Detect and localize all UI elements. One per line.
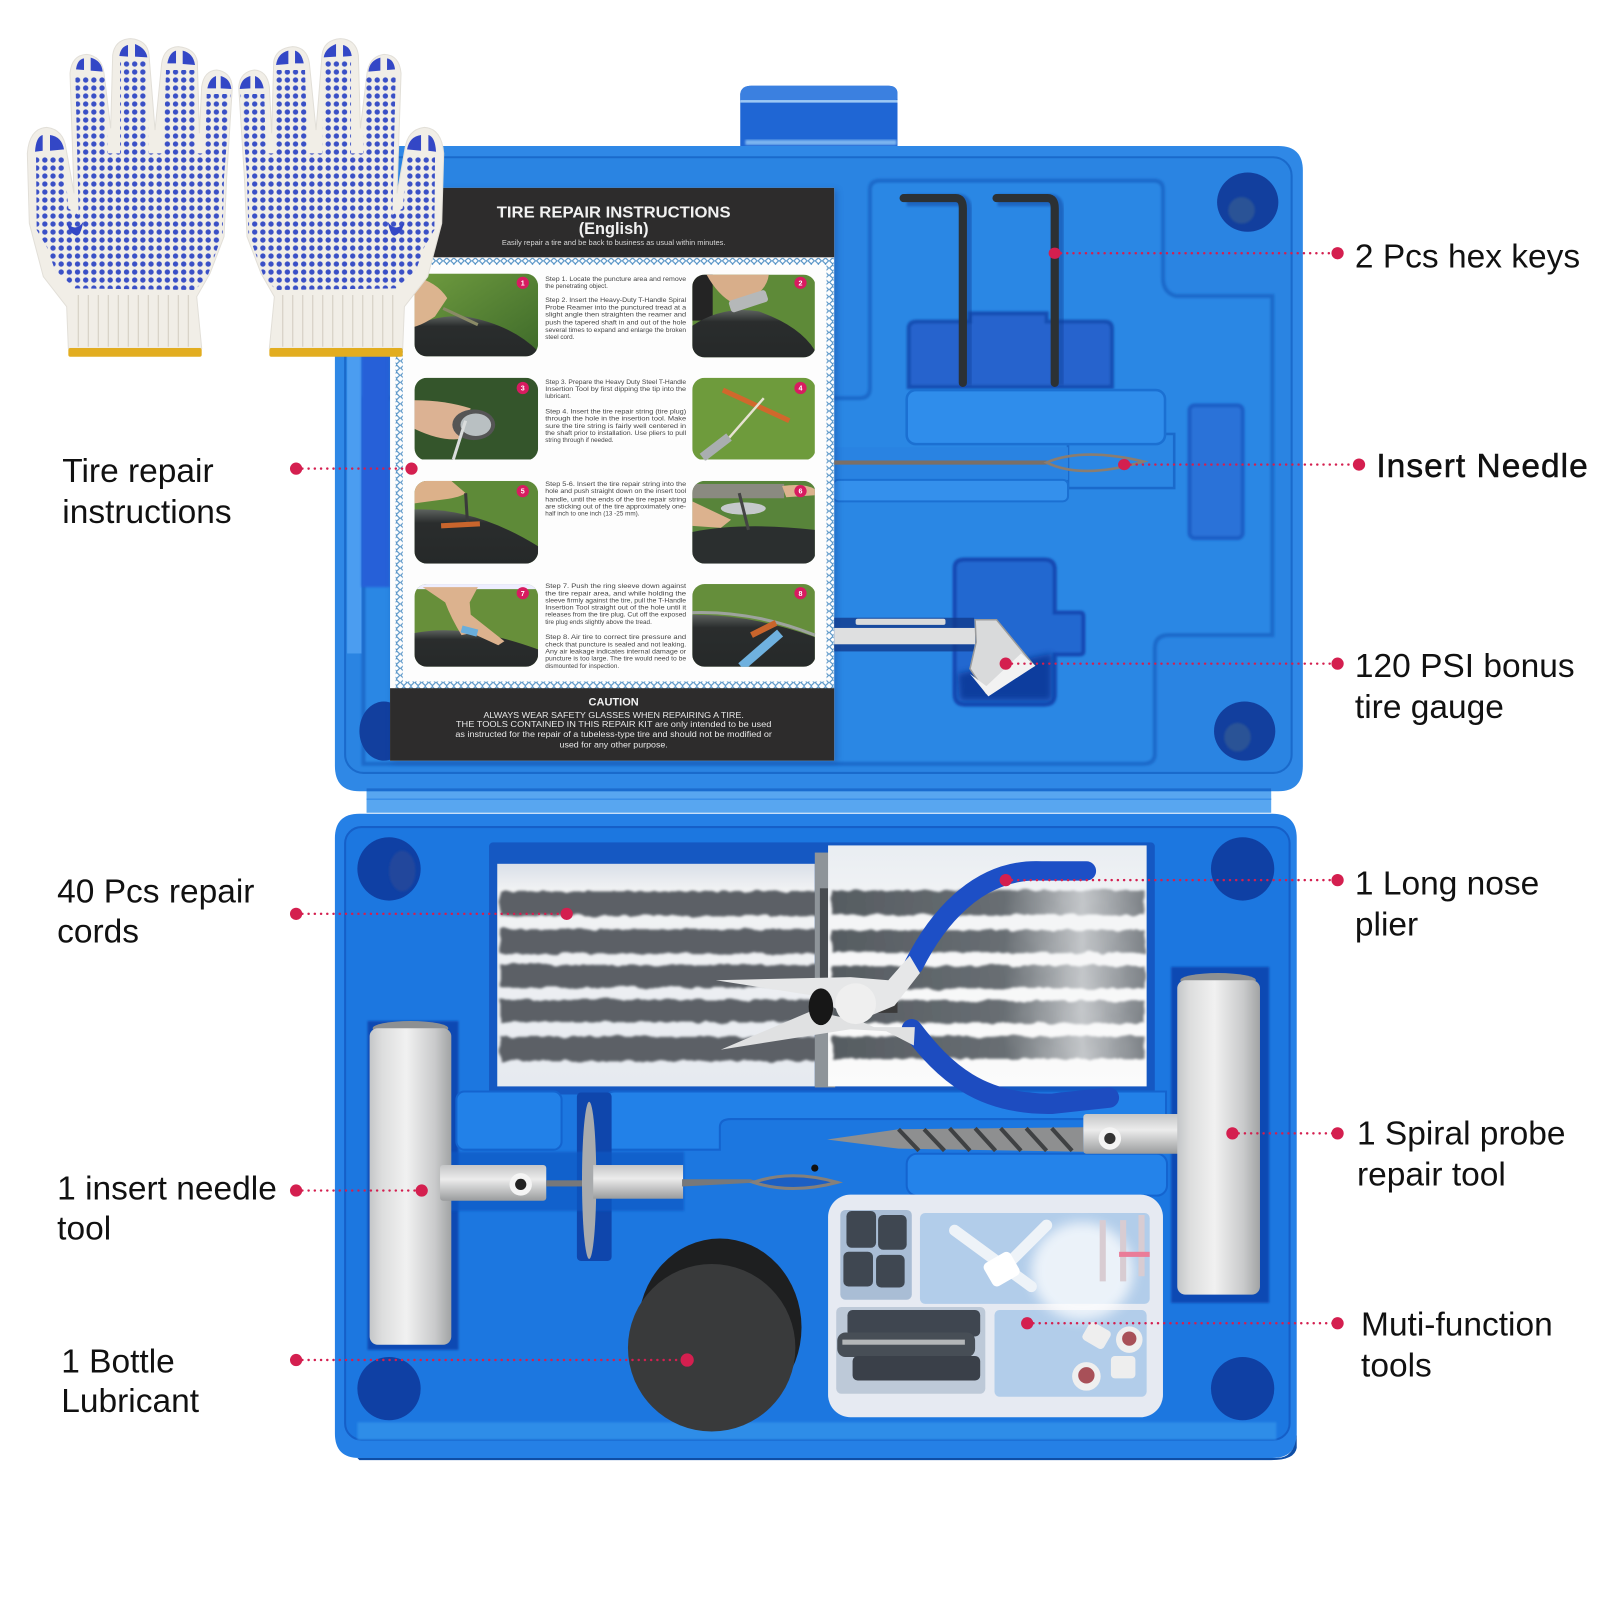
sheet step text: Step 4. Insert the tire repair string (tire plug): [545, 409, 686, 416]
left handle recess: [368, 1021, 458, 1350]
callout: Muti-function tools: Muti-function: [1361, 1307, 1553, 1344]
icon: spiral probe T-handle tool: [827, 973, 1260, 1295]
icon: work gloves: [27, 39, 444, 357]
callout: Tire repair instructions: [62, 453, 418, 531]
sheet step text: puncture is too large. The tire would need to be: [545, 656, 687, 663]
valve tool and glare: [955, 1215, 1150, 1320]
sheet step text: Probe Reamer into the punctured tread at a: [545, 304, 687, 311]
sheet caution footer: ALWAYS WEAR SAFETY GLASSES WHEN REPAIRING A TIRE.: [483, 711, 744, 720]
sheet step text: Insertion Tool by first dipping the tip into the: [545, 386, 687, 393]
callout: 1 Spiral probe repair tool: repair tool: [1357, 1156, 1506, 1193]
needle channel end: [1068, 434, 1174, 488]
sheet header: Easily repair a tire and be back to business as usual within minutes.: [502, 240, 726, 247]
sheet caution footer: used for any other purpose.: [560, 740, 668, 749]
sheet step text: push the tapered shaft in and out of the hole: [545, 320, 687, 327]
photo number badges: 8: [799, 590, 803, 598]
sheet step text: string through if needed.: [545, 437, 614, 444]
tray recess: [489, 842, 1155, 1095]
sheet step text: are sticking out of the tire approximately one-: [545, 503, 686, 510]
valve caps red: [1072, 1321, 1143, 1391]
sheet step text: dismounted for inspection.: [545, 663, 619, 670]
callout: 1 Long nose plier: plier: [1355, 906, 1418, 943]
sheet step text: the shaft prior to installation. Use pliers to pull: [545, 430, 686, 437]
sheet step text: sure the tire string is fairly well centered in: [545, 423, 687, 430]
callout: 40 Pcs repair cords: cords: [57, 913, 139, 950]
callout: 1 insert needle tool: 1 insert needle: [57, 1171, 277, 1208]
sheet step text: Any air leakage indicates internal damage or: [545, 648, 686, 655]
callout: Tire repair instructions: Tire repair: [62, 453, 214, 490]
callout: Muti-function tools: [1021, 1307, 1553, 1384]
photo number badges: 4: [799, 385, 803, 393]
sheet step text: lubricant.: [545, 393, 571, 400]
sheet step text: the penetrating object.: [545, 283, 608, 290]
raised strip: [833, 480, 1068, 501]
photo number badges: 3: [521, 385, 525, 393]
callout: 40 Pcs repair cords: [57, 874, 573, 950]
left light strip: [347, 347, 361, 653]
sheet step text: tire plug ends slightly above the tread.: [545, 619, 652, 626]
photo number badges: 1: [521, 279, 525, 287]
sheet step text: Step 2. Insert the Heavy-Duty T-Handle Spiral: [545, 297, 686, 304]
photo 6: [692, 481, 815, 564]
icon: insert needle: [834, 455, 1144, 471]
handle channel shadow: [449, 1152, 684, 1211]
panel: blue case upper half: [335, 86, 1303, 791]
raised block probe: [907, 1154, 1167, 1196]
sheet step text: Step 5-6. Insert the tire repair string into the: [545, 481, 687, 488]
photo 1: [415, 274, 538, 356]
photo number badges: 7: [521, 590, 525, 598]
sheet step text: handle, until the ends of the tire repair string: [545, 496, 687, 503]
sheet step text: sleeve firmly against the tire, pull the T-Handle: [545, 597, 687, 604]
callout: 1 Bottle Lubricant: Lubricant: [61, 1383, 200, 1420]
callout: 120 PSI bonus tire gauge: [1000, 648, 1575, 726]
icon: tire gauge: [834, 618, 1035, 696]
raised block right: [607, 1091, 1166, 1150]
sheet step text: [545, 276, 687, 670]
photo 4: [692, 378, 815, 459]
photo 5: [415, 481, 538, 564]
case latch: [740, 86, 897, 153]
right handle recess: [1171, 967, 1269, 1303]
photo 2: [692, 275, 815, 357]
photo 3: [415, 378, 538, 459]
compartments: [836, 1210, 1150, 1397]
callout: Insert Needle: [1118, 448, 1589, 485]
sheet step text: hole and push straight down on the insert tool: [545, 488, 686, 495]
sheet step text: the tire repair area, and while holding the: [545, 590, 687, 597]
panel: repair cords packs: [497, 845, 1147, 1087]
valve caps: [843, 1211, 907, 1288]
left cord pack: [497, 864, 819, 1086]
sheet step text: Step 8. Air tire to correct tire pressure and: [545, 634, 687, 641]
callout: 2 Pcs hex keys: 2 Pcs hex keys: [1355, 239, 1580, 276]
icon: long nose pliers: [716, 871, 1109, 1104]
sheet step text: slight angle then straighten the reamer and: [545, 312, 687, 319]
sheet header: [390, 188, 834, 257]
panel: blue case lower half: [335, 814, 1297, 1460]
icon: insert needle T-handle tool: [370, 1021, 837, 1345]
sheet caution footer: CAUTION: [589, 697, 639, 709]
callout: Tire repair instructions: instructions: [62, 494, 232, 531]
raised bar: [907, 390, 1165, 444]
photo 7: [415, 584, 538, 667]
photo 8: [692, 584, 815, 667]
right cord pack: [828, 845, 1147, 1086]
sheet step text: Step 7. Push the ring sleeve down against: [545, 583, 686, 590]
sheet caution footer: as instructed for the repair of a tubeless-type tire and should not be modified or: [455, 730, 772, 739]
callout: 1 Bottle Lubricant: 1 Bottle: [61, 1343, 175, 1380]
photo number badges: 2: [799, 279, 803, 287]
callout: 120 PSI bonus tire gauge: tire gauge: [1355, 689, 1504, 726]
callout: Muti-function tools: tools: [1361, 1347, 1432, 1384]
rim highlight: [357, 1422, 1276, 1440]
hex pocket: [909, 313, 1112, 387]
sheet caution footer: [390, 688, 834, 761]
sheet step text: releases from the tire plug. Cut off the exposed: [545, 612, 687, 619]
sheet step text: half inch to one inch (13 -25 mm).: [545, 511, 640, 518]
callout: 1 insert needle tool: [57, 1171, 428, 1248]
photo number badges: 6: [799, 488, 803, 496]
needle channel: [835, 447, 1068, 480]
divider fold: [815, 853, 835, 1087]
callout: 1 Spiral probe repair tool: [1226, 1116, 1565, 1193]
disc slot: [577, 1093, 612, 1261]
corner holes: [1217, 173, 1278, 232]
callout: 2 Pcs hex keys: [1049, 239, 1580, 276]
callout: 1 insert needle tool: tool: [57, 1211, 111, 1248]
sheet step text: several times to expand and enlarge the broken: [545, 327, 687, 334]
gauge pocket: [955, 560, 1083, 705]
callout: 1 Bottle Lubricant: [61, 1343, 694, 1420]
sheet step text: check that puncture is sealed and not leaking.: [545, 641, 686, 648]
icon: lubricant bottle: [628, 1239, 802, 1432]
icon: hex keys: [904, 198, 1058, 385]
sheet step text: Insertion Tool straight out of the hole until it: [545, 605, 686, 612]
raised block left: [456, 1091, 562, 1150]
callout: 40 Pcs repair cords: 40 Pcs repair: [57, 874, 254, 911]
sheet header: (English): [579, 220, 649, 238]
main recess of upper foam: [363, 181, 1272, 764]
photo number badges: 5: [521, 488, 525, 496]
callout: Insert Needle: Insert Needle: [1376, 448, 1589, 485]
sheet step text: Step 1. Locate the puncture area and remove: [545, 276, 687, 283]
panel: instruction sheet: [390, 188, 837, 763]
callout: 1 Long nose plier: 1 Long nose: [1355, 865, 1539, 902]
callout: 1 Spiral probe repair tool: 1 Spiral probe: [1357, 1116, 1565, 1153]
sheet step text: through the hole in the insertion tool. Make: [545, 416, 687, 423]
sheet step text: steel cord.: [545, 334, 575, 341]
sheet caution footer: THE TOOLS CONTAINED IN THIS REPAIR KIT are only intended to be used: [456, 720, 772, 729]
callout: 120 PSI bonus tire gauge: 120 PSI bonus: [1355, 648, 1575, 685]
hinge band: [367, 788, 1271, 813]
sheet step text: Step 3. Prepare the Heavy Duty Steel T-Handle: [545, 379, 687, 386]
sheet header: TIRE REPAIR INSTRUCTIONS: [497, 204, 731, 221]
callout: 1 Long nose plier: [1000, 865, 1539, 943]
left slot: [361, 347, 390, 587]
panel: multi-function tool box: [828, 1195, 1163, 1417]
corner holes: [357, 837, 1274, 1420]
sheet chain border: [399, 261, 830, 685]
photo number badges: [517, 277, 807, 599]
rubber tubes: [837, 1310, 980, 1380]
right inner pocket: [1190, 405, 1243, 538]
